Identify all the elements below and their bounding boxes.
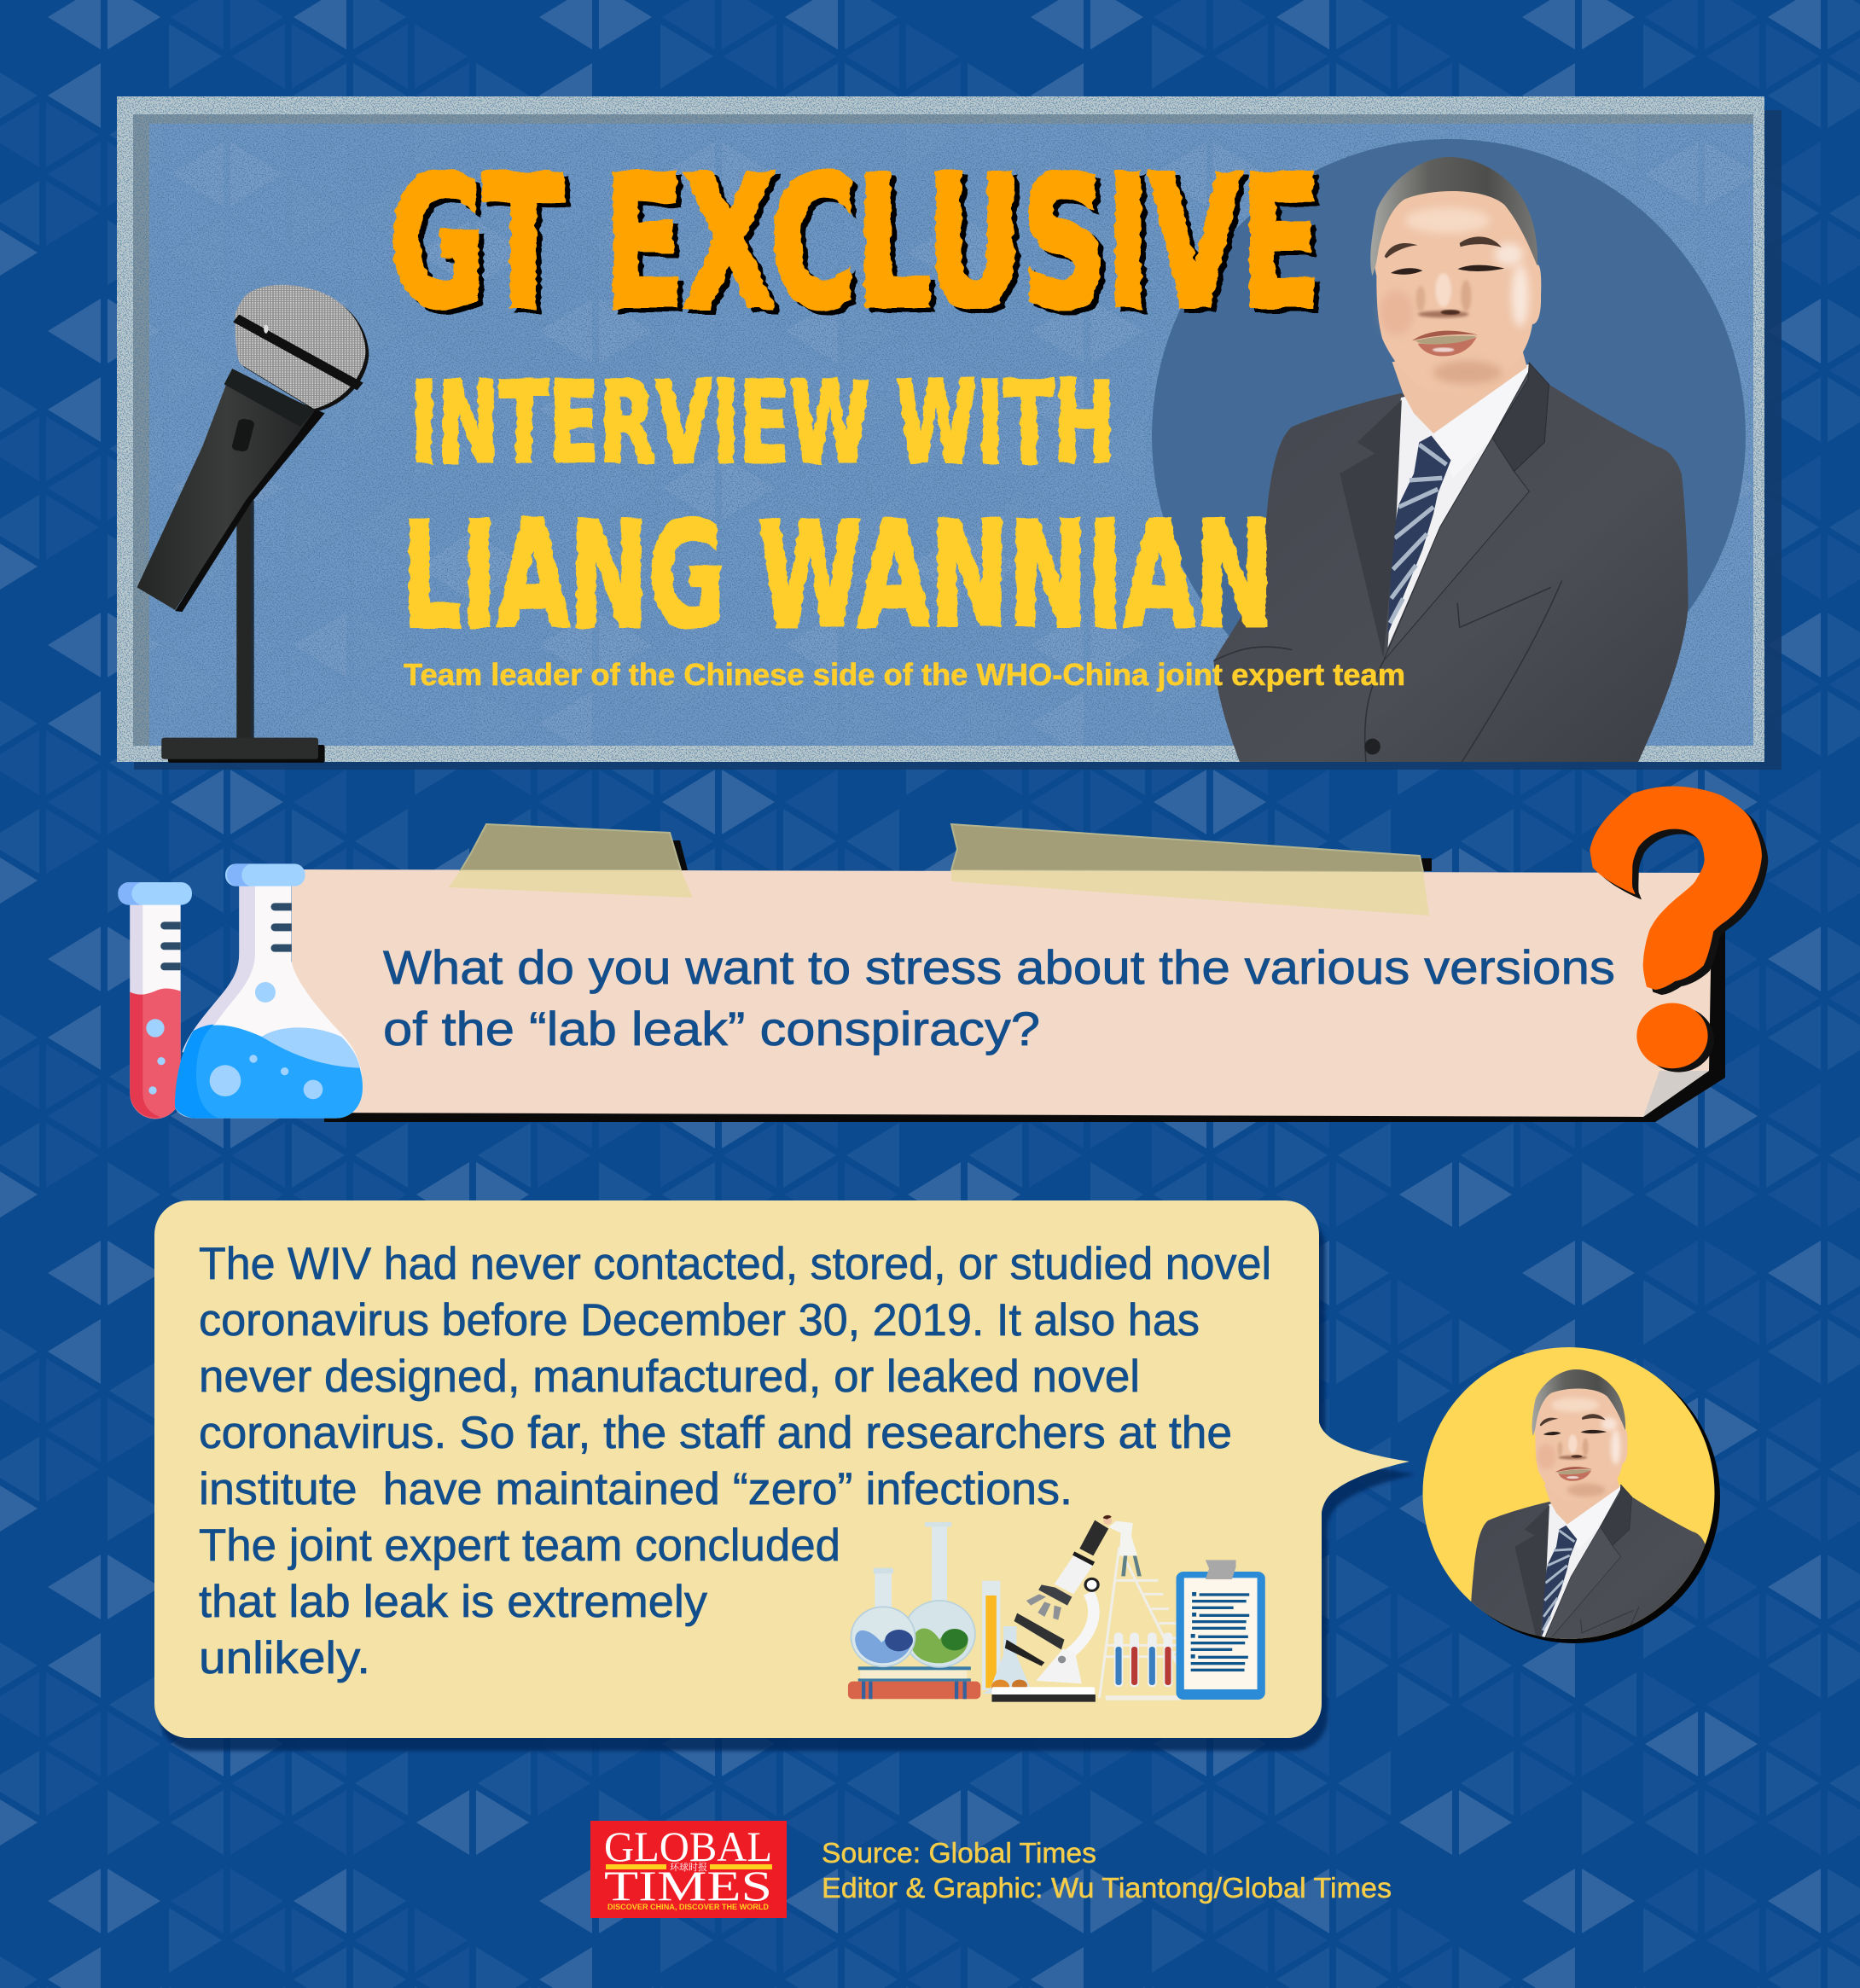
- small flask: [851, 1568, 915, 1666]
- tape: left: [449, 824, 693, 898]
- portrait circle backdrop: [1152, 139, 1746, 733]
- question text: [383, 940, 1615, 1055]
- answer text: coronavirus. So far, the staff and researchers at the: [199, 1408, 1232, 1458]
- answer text: that lab leak is extremely: [199, 1577, 708, 1627]
- large flask: [904, 1522, 975, 1667]
- tape: right: [951, 824, 1432, 916]
- clipboard: [1177, 1560, 1265, 1700]
- answer text: [199, 1239, 1271, 1683]
- panel: question note: [118, 786, 1768, 1122]
- footer logo: Global Times: DISCOVER CHINA, DISCOVER THE WORLD: [607, 1903, 769, 1912]
- footer credits: [822, 1837, 1392, 1904]
- measuring cylinder: [982, 1581, 1000, 1690]
- panel: title banner: [117, 96, 1782, 770]
- portrait: Liang Wannian: [1213, 157, 1689, 762]
- books: [848, 1666, 980, 1699]
- footer credits: Source: Global Times: [822, 1837, 1096, 1869]
- icon: test tube: [118, 882, 192, 1119]
- answer text: The WIV had never contacted, stored, or studied novel: [199, 1239, 1271, 1289]
- footer logo: Global Times: GLOBAL: [604, 1822, 772, 1870]
- portrait: circular avatar: [1423, 1347, 1720, 1643]
- conical flask: [982, 1626, 1030, 1694]
- heading: GT EXCLUSIVE: GT EXCLUSIVE: [389, 137, 1321, 348]
- footer logo: Global Times: TIMES: [604, 1862, 772, 1910]
- heading: INTERVIEW WITH: INTERVIEW WITH: [410, 357, 1115, 489]
- ladder: [1100, 1547, 1207, 1698]
- page fold: [1643, 1071, 1709, 1117]
- footer logo: Global Times: 环球时报: [670, 1860, 707, 1874]
- scientist: [1103, 1515, 1142, 1576]
- footer credits: Editor & Graphic: Wu Tiantong/Global Times: [822, 1872, 1392, 1904]
- answer text: coronavirus before December 30, 2019. It also has: [199, 1295, 1200, 1346]
- icon: flask: [175, 863, 363, 1119]
- answer text: never designed, manufactured, or leaked novel: [199, 1351, 1140, 1402]
- answer text: institute have maintained “zero” infections.: [199, 1464, 1072, 1514]
- icon: question mark: [1590, 786, 1768, 1072]
- panel: answer speech bubble: [154, 1200, 1415, 1751]
- microscope: [991, 1520, 1108, 1702]
- illustration: lab equipment: [848, 1515, 1265, 1702]
- footer logo: Global Times: [590, 1821, 787, 1918]
- icon: microphone on stand: [137, 285, 369, 763]
- question text: of the “lab leak” conspiracy?: [383, 1002, 1040, 1055]
- question text: What do you want to stress about the various versions: [383, 940, 1615, 994]
- answer text: unlikely.: [199, 1633, 370, 1683]
- subtitle: Team leader of the Chinese side of the WHO-China joint expert team: [404, 657, 1405, 692]
- answer text: The joint expert team concluded: [199, 1520, 840, 1571]
- heading: LIANG WANNIAN: LIANG WANNIAN: [402, 491, 1274, 660]
- test tubes: [1114, 1632, 1172, 1687]
